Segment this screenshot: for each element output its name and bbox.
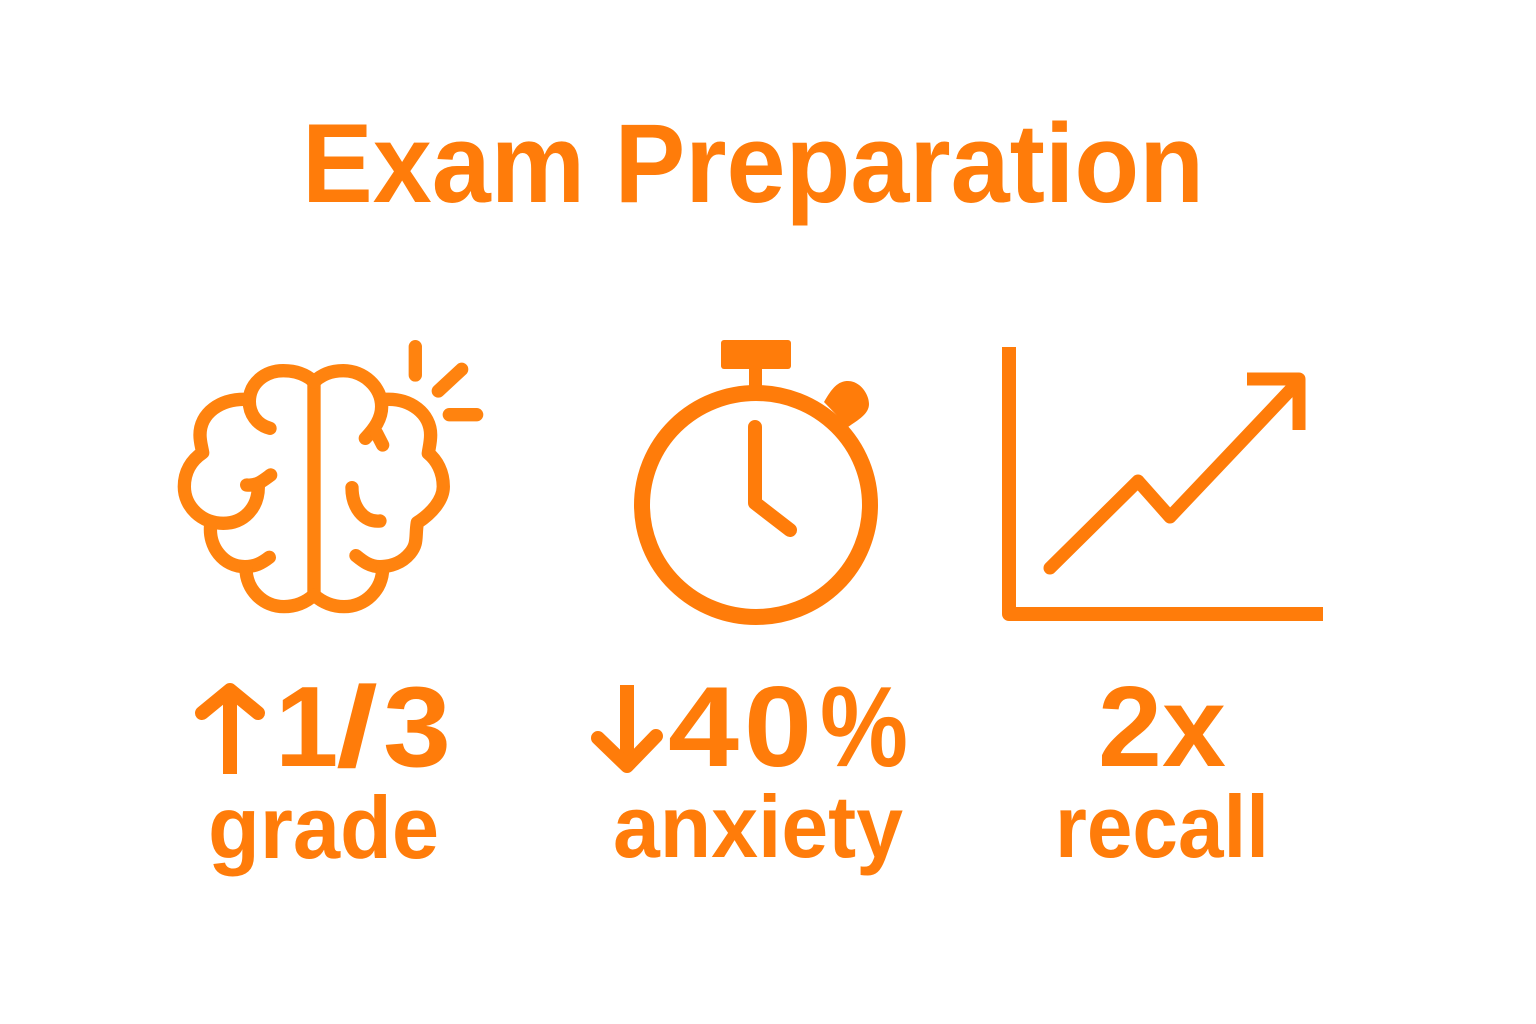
value: 2x: 2x <box>1098 664 1226 791</box>
icon: stopwatch <box>642 340 870 617</box>
title: Exam Preparation <box>302 101 1204 226</box>
stat: forty percent anxiety decrease <box>598 664 908 876</box>
label: grade: grade <box>208 778 439 877</box>
value: 1/3: 1 <box>275 664 338 791</box>
value: 1/3 <box>275 664 451 791</box>
icon: brain with sparks <box>184 347 477 607</box>
icon: rising line chart <box>1009 347 1323 614</box>
stat: one third grade increase <box>202 664 451 877</box>
value: 1/3: 3 <box>383 664 451 791</box>
stat: double recall <box>1055 664 1269 876</box>
label: recall: recall <box>1055 777 1269 876</box>
value: 40%: 4 <box>668 664 739 791</box>
value: 40% <box>668 664 908 791</box>
icon: down arrow <box>598 685 656 766</box>
value: 40%: 0 <box>744 664 812 791</box>
value: 1/3: / <box>336 664 378 791</box>
icon: up arrow <box>202 690 258 774</box>
value: 40%: % <box>820 664 908 791</box>
label: anxiety: anxiety <box>613 777 903 876</box>
